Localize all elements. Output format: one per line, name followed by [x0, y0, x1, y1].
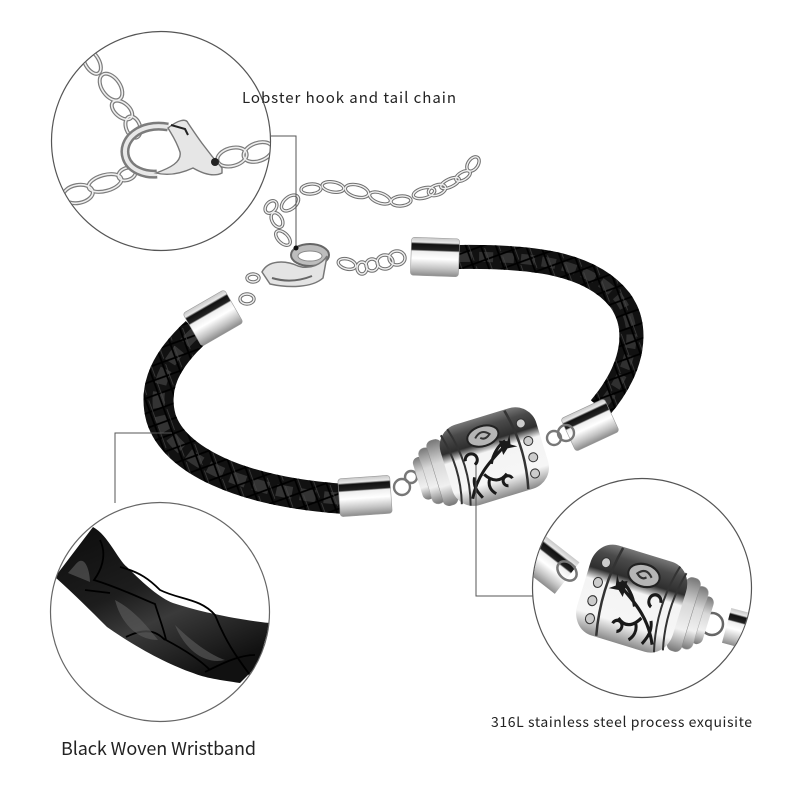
- leader line: clasp: [271, 136, 296, 248]
- lobster clasp: [262, 244, 329, 286]
- detail circle: lobster hook: [52, 32, 275, 250]
- detail circle: steel charm: [519, 478, 766, 698]
- label: woven wristband: Black Woven Wristband: [61, 735, 256, 761]
- label: stainless steel: 316L stainless steel process exquisite: [491, 712, 752, 732]
- braided cord: [158, 257, 631, 499]
- leader dot: clasp: [294, 246, 298, 250]
- cap and ring, left: [534, 536, 580, 594]
- detail circle: woven band: [50, 502, 270, 722]
- tail chain links: [240, 155, 482, 304]
- leader line: wristband: [115, 433, 172, 503]
- metal cord caps: [183, 237, 619, 517]
- leader line: charm: [476, 465, 536, 596]
- connector rings: [394, 425, 574, 495]
- engraved steel charm: [406, 402, 554, 520]
- cap and ring, right: [722, 608, 748, 646]
- label: lobster hook: Lobster hook and tail chain: [242, 87, 456, 108]
- panel: bracelet: [158, 155, 631, 520]
